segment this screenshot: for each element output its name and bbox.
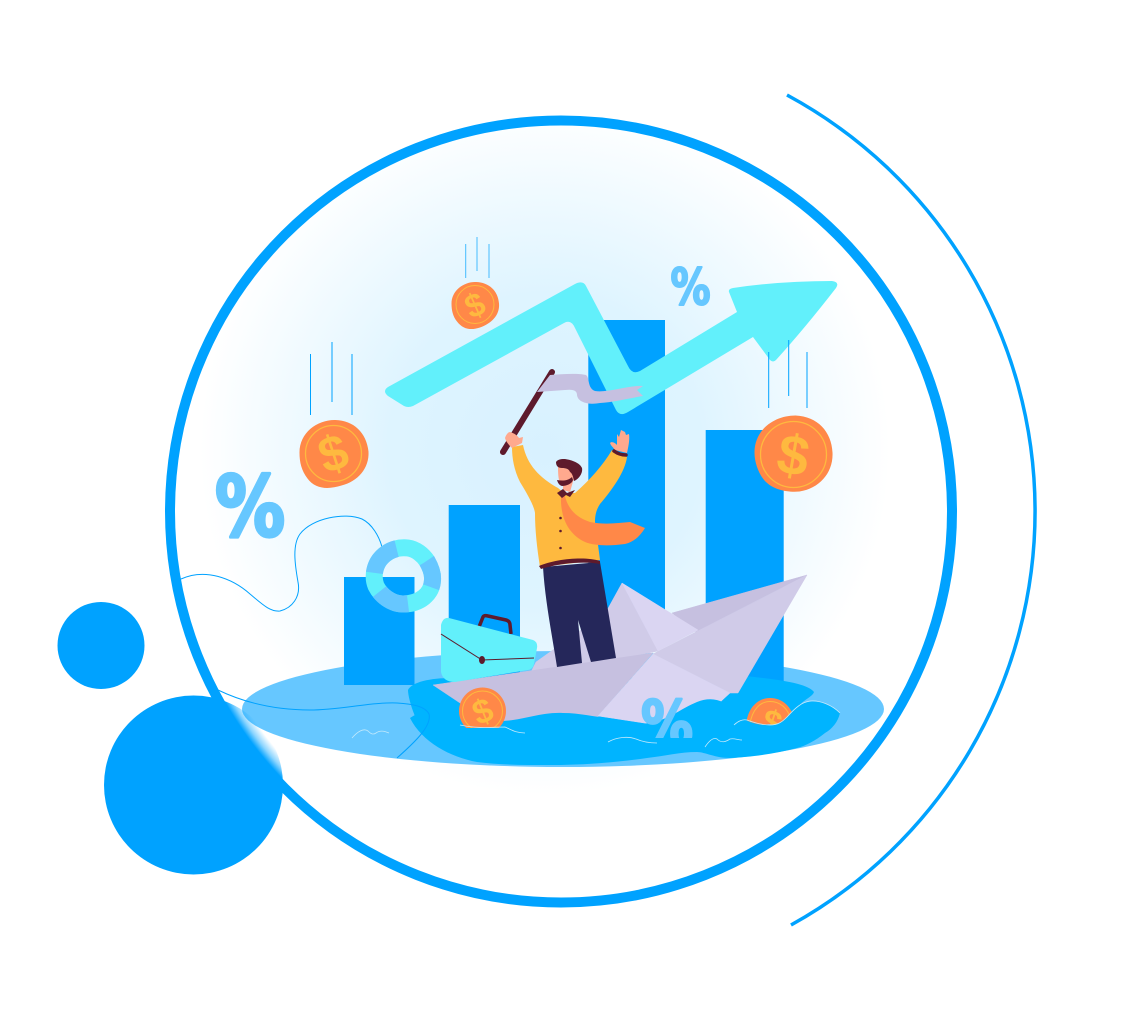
illustration: businessman on paper boat [58,94,1037,926]
small blue circle [58,602,144,689]
percent icon small: % [670,258,711,317]
hair [556,459,582,481]
water ripples [352,701,840,747]
belt [539,559,600,569]
left hand [505,432,523,448]
collar [557,489,575,498]
strap [441,634,534,660]
boat left peak [528,583,658,678]
coin right [754,416,833,492]
donut icon [374,548,433,604]
boat back fold [672,575,807,632]
percent in water: % [641,689,693,760]
briefcase [441,616,537,682]
businessman [505,430,645,667]
neck and face [558,466,574,492]
coin left: $ [311,423,355,484]
boat hull [433,653,653,735]
beard [557,477,573,486]
coin floating left: $ [467,691,499,733]
coin top [452,282,499,329]
coin left [300,420,369,488]
coin floating right: $ [757,702,787,744]
case body [441,618,537,682]
right hand [610,430,629,453]
handle [479,616,511,634]
cuff [614,451,626,455]
bar chart [344,320,784,685]
wire left [181,516,382,611]
buttons [559,517,562,549]
boat right side [653,575,807,693]
rising arrow [385,281,837,414]
coin floating left [459,688,506,728]
percent icon large: % [215,459,285,557]
flag [537,374,643,404]
boat right peak [622,583,698,651]
coin top: $ [459,284,491,326]
water back [408,676,814,760]
water ellipse [242,651,884,767]
motion lines [310,237,807,415]
sweater [512,445,627,567]
clasp [479,656,485,664]
background ring with glow [170,120,952,902]
trousers [543,562,616,667]
outer arc [787,95,1035,925]
wire lower [218,690,429,758]
water front waves [410,699,840,765]
paper boat [433,575,807,735]
flag pole [503,372,552,452]
coin floating right [746,698,795,744]
coin right: $ [773,421,814,489]
boat front fold [598,654,730,730]
tie [561,493,645,545]
large blue circle [104,696,283,874]
